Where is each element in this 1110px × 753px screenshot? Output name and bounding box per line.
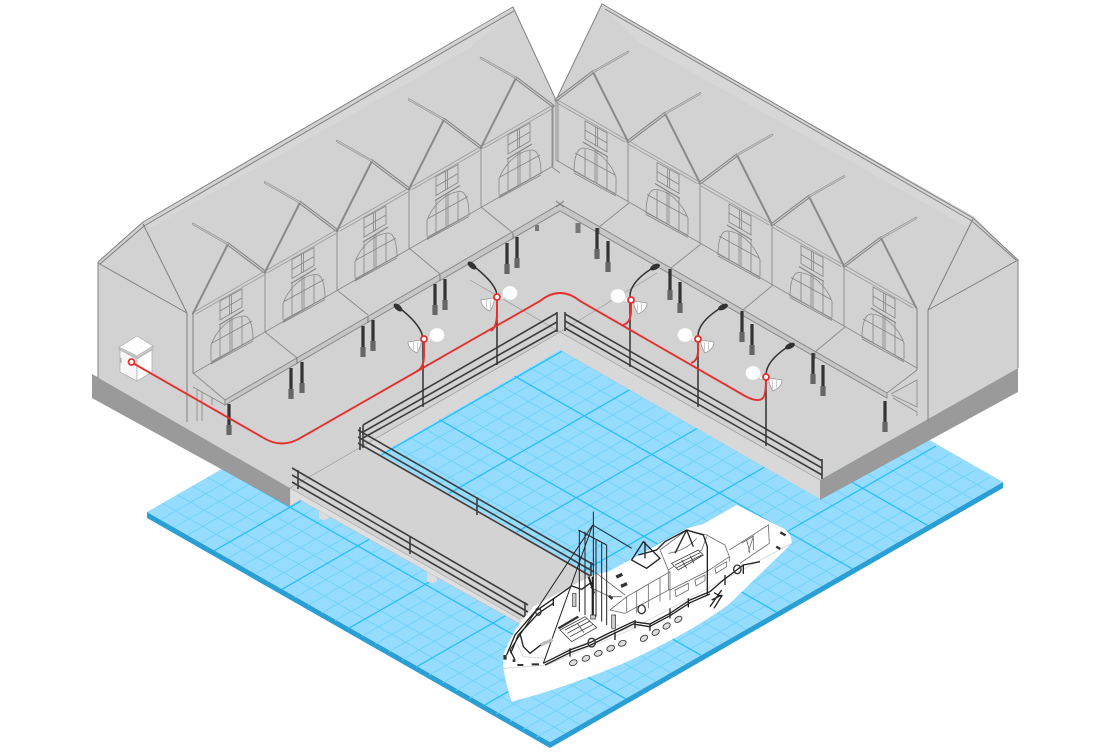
floodlights (408, 286, 782, 391)
deck fittings (503, 531, 786, 666)
building outline and roof ridges (98, 4, 1018, 619)
life rings (536, 565, 741, 647)
mast and rigging (510, 512, 632, 663)
lamp pole 2 (467, 261, 497, 365)
skylight and hatch (558, 550, 703, 642)
left terrace windows (211, 123, 541, 364)
hull (503, 505, 792, 702)
street lamps (393, 261, 795, 446)
pier deck (290, 446, 600, 622)
lamp pole 5 (766, 342, 795, 446)
lamp pole 4 (698, 303, 728, 407)
building and quay silhouette (92, 5, 1018, 488)
quay inner face (362, 330, 820, 499)
cable connection points (128, 294, 769, 380)
red power cable (131, 293, 766, 444)
superstructure (590, 525, 769, 613)
left terrace roof units (193, 58, 553, 374)
quay railings (292, 312, 822, 621)
deck edge (503, 543, 792, 668)
right terrace windows (574, 121, 904, 362)
portholes (569, 615, 683, 667)
pier supports and side face (290, 488, 524, 624)
mast base (573, 593, 616, 628)
lamp pole 1 (393, 303, 423, 407)
roof shading bands (145, 7, 970, 228)
water base with grid (147, 252, 1003, 748)
right terrace roof units (556, 52, 916, 368)
platform base strips (92, 368, 1018, 507)
moored boat (503, 505, 792, 702)
awning support posts (226, 223, 888, 435)
electrical cabinet (119, 336, 153, 381)
awning front edges (193, 201, 917, 421)
lamp pole 3 (630, 263, 660, 367)
railings (507, 530, 760, 665)
